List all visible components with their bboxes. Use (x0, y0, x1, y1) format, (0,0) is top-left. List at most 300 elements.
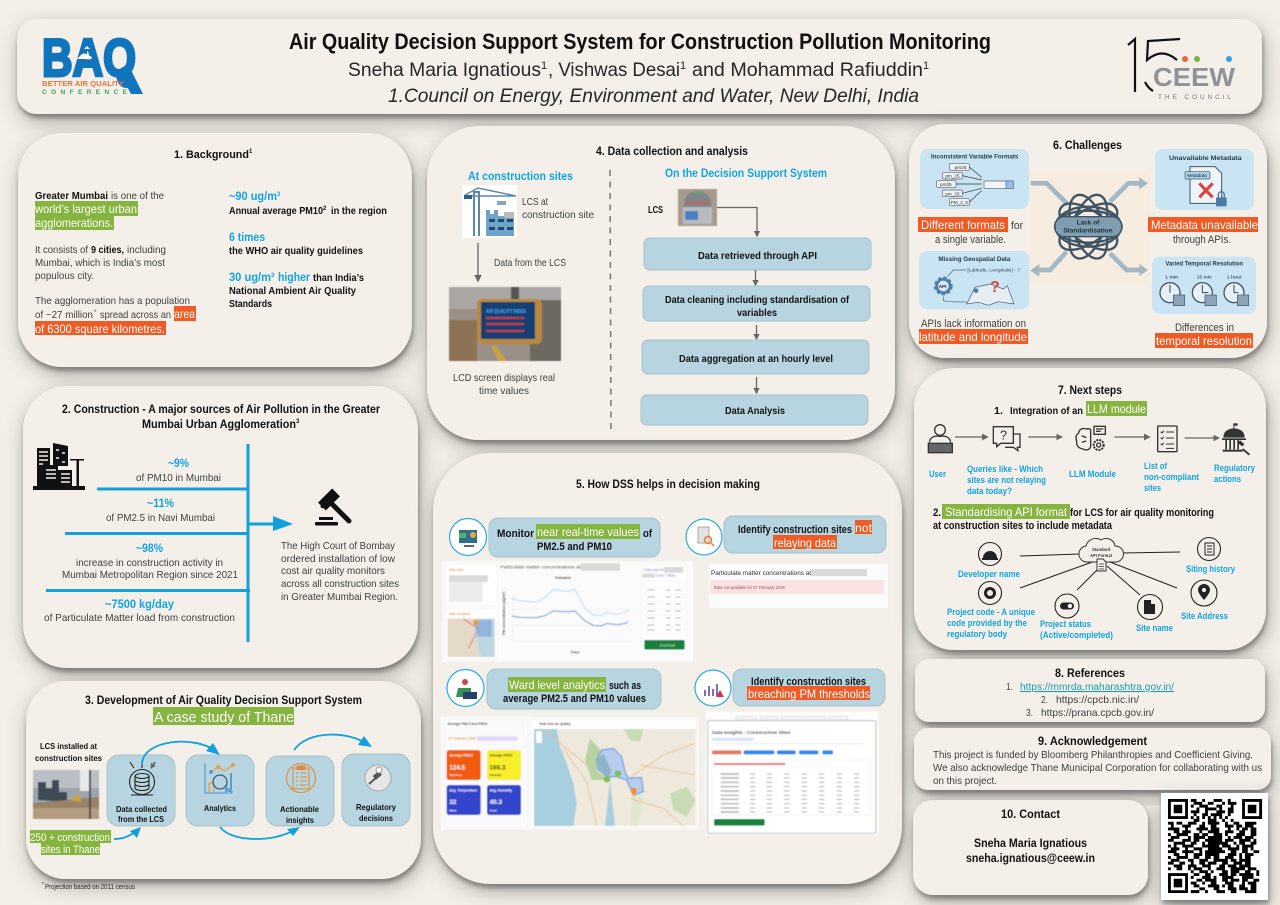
card: inconsistent formats: pm_25 (945, 191, 960, 196)
node: project status (1040, 594, 1113, 641)
card: not relaying: relaying data (774, 536, 836, 550)
caption: different formats: a single variable. (935, 234, 1006, 246)
heading: 7. Next steps (1058, 385, 1122, 397)
stat: 9%: ~9% (168, 458, 189, 470)
text block: population: * (94, 310, 97, 316)
subheading: standardising API (933, 504, 1214, 532)
text block: Greater Mumbai: is one of the (111, 190, 164, 202)
step: analysis (641, 395, 868, 425)
label: LCS installed: construction sites (35, 753, 102, 763)
flow box: analytics (186, 755, 254, 826)
labels: pipeline steps: Queries like - Which (967, 464, 1043, 475)
screenshot: monitoring dashboard (442, 561, 693, 662)
text block: 9 cities: 9 cities, (91, 244, 124, 256)
text block: funding (933, 749, 1262, 787)
icon: monitor (450, 518, 486, 556)
screenshot: ward dashboard: 07 February 2026 (448, 736, 476, 740)
stat: 30 ug/m3 higher: National Ambient Air Quality (229, 285, 356, 297)
screenshot: ward dashboard: Avg. Humidity (490, 789, 512, 793)
stat: 98%: ~98% (136, 543, 163, 555)
screenshot: monitoring dashboard: Download (660, 643, 675, 647)
node: site name: Site name (1136, 623, 1173, 634)
icon: gavel (315, 489, 349, 526)
screenshot: ward dashboard (441, 717, 698, 829)
caption: temporal: Differences in (1175, 322, 1234, 334)
icon: regulatory gavel (365, 765, 391, 791)
card: unavailable metadata: Metadata (1187, 173, 1207, 178)
panel: 7 Next steps (914, 368, 1266, 650)
node: developer name (958, 542, 1020, 580)
node: site address: Site Address (1181, 611, 1228, 622)
heading: 6. Challenges (1053, 140, 1122, 152)
text block: Greater Mumbai (34, 190, 164, 230)
text block: Greater Mumbai: world’s largest urban (34, 202, 137, 216)
text block: funding: on this project. (933, 775, 997, 787)
card: inconsistent formats: PM_2_5 (951, 200, 968, 205)
authors: and Mohammad Rafiuddin (692, 59, 923, 81)
flow box: analytics: Analytics (204, 803, 236, 813)
photo: LCD screen (449, 287, 561, 361)
step: cleaning: variables (737, 307, 777, 319)
list: references (1006, 681, 1174, 719)
contact details (966, 838, 1095, 865)
screenshot: ward dashboard: Average PM10 (490, 754, 512, 758)
stat: 90 ug/m3: 3 (277, 192, 281, 198)
subheading: standardising API: Standardising API format (945, 505, 1068, 519)
text block: population: of ~27 million (35, 309, 93, 321)
screenshot: ward dashboard: 166.3 (490, 764, 506, 771)
stat: 7500 kg/day: of Particulate Matter load from construction (44, 612, 235, 624)
flow box: data collected: Data collected (116, 804, 167, 814)
card: inconsistent formats (920, 149, 1029, 209)
card: inconsistent formats: Inconsistent Variable Formats (931, 153, 1019, 160)
heading: at construction sites: At construction sites (468, 169, 573, 183)
text block: population: The agglomeration has a population (35, 295, 190, 307)
node: project status: (Active/completed) (1040, 630, 1113, 641)
subheading: standardising API: at construction sites to include metadata (933, 520, 1113, 532)
authors: Sneha Maria Ignatious (348, 59, 541, 81)
labels: pipeline steps: Regulatory (1214, 463, 1256, 474)
card: missing geospatial: API (939, 284, 946, 289)
icon: user at keyboard (928, 425, 952, 453)
stat: 30 ug/m3 higher: Standards (229, 298, 272, 310)
stat: 98% (62, 543, 238, 581)
step: aggregation: Data aggregation at an hourly level (679, 353, 833, 365)
flow box: actionable insights (266, 756, 334, 826)
icon: brain and gear (1076, 426, 1105, 450)
panel: 1 Background (18, 133, 412, 367)
labels: pipeline steps: List of (1144, 461, 1168, 472)
node: project code: regulatory body (947, 629, 1008, 640)
card: unavailable metadata (1155, 149, 1254, 210)
panel: 2 Construction (23, 386, 418, 668)
step: cleaning (643, 286, 870, 321)
arrow (754, 270, 756, 285)
screenshot: monitoring dashboard: Daily data for (644, 568, 665, 572)
card: inconsistent formats: pm25 (955, 165, 967, 170)
arrow: data from LCS: Data from the LCS (494, 257, 566, 269)
text block: 9 cities: including (127, 244, 166, 256)
arrow: LCS to API (717, 208, 757, 236)
card: monitor: of (643, 528, 652, 540)
logo: BAQ: BAQ (42, 29, 136, 88)
icon: analytics chart (205, 763, 235, 793)
authors: , Vishwas Desai (548, 59, 680, 81)
diagram: fishbone lines and arrow (46, 444, 293, 642)
stat: 7500 kg/day (44, 599, 235, 624)
step: API: Data retrieved through API (698, 250, 817, 262)
screenshot: no data message: Particulate matter concentrations at (711, 570, 811, 577)
screenshot: data insights table (706, 712, 878, 835)
icon: clipboard (286, 764, 316, 792)
screenshot: monitoring dashboard: Site Info (449, 568, 464, 572)
subheading: LLM integration (994, 401, 1147, 417)
panel: 5 How DSS helps (433, 453, 902, 884)
text block: High Court order: across all construction sites (281, 578, 399, 590)
icon: database (130, 761, 155, 795)
text block: 9 cities: populous city. (35, 270, 94, 282)
heading: Mumbai Urban Agglomeration (142, 419, 296, 431)
footnote (42, 882, 135, 891)
card: ward analytics: Ward level analytics (509, 678, 605, 692)
labels: pipeline steps: sites (1144, 483, 1161, 494)
card: not relaying (724, 516, 886, 553)
arrow (955, 435, 987, 439)
screenshot: ward dashboard: 40.3 (490, 799, 502, 806)
authors: 1 (680, 60, 686, 72)
labels: pipeline steps: sites are not relaying (967, 475, 1046, 486)
card: ward analytics (487, 669, 661, 709)
icon: cloud standard API format (1079, 538, 1124, 571)
icon: ward map pin (447, 670, 484, 706)
arrow: data from LCS (478, 243, 566, 281)
stat: 90 ug/m3: 2 (323, 206, 327, 212)
arrow (756, 377, 758, 393)
stat: 6 times: the WHO air quality guidelines (229, 245, 363, 257)
flow box: actionable insights: Actionable (280, 804, 319, 814)
list: references: 1. (1006, 681, 1013, 693)
diagram: lack of standardisation (1030, 172, 1150, 283)
labels: pipeline steps: data today? (967, 486, 1012, 497)
logo: CEEW (1128, 39, 1235, 101)
panel: 6 Challenges (909, 124, 1267, 358)
screenshot: no data message: Data not available for 07 February 2026. (714, 585, 786, 590)
screenshot: monitoring dashboard: Time (570, 650, 580, 655)
labels: pipeline steps: actions (1214, 474, 1241, 485)
heading: 1 (249, 149, 253, 155)
node: site address (1181, 580, 1228, 622)
screenshot: monitoring dashboard: Pollutants (555, 576, 571, 580)
caption: temporal: temporal resolution (1156, 334, 1252, 348)
contact details: Sneha Maria Ignatious (974, 838, 1087, 850)
diagram: API spokes (1020, 552, 1180, 595)
screenshot: ward dashboard: Moderate (490, 773, 502, 777)
screenshot: monitoring dashboard: (Last 7 days) (656, 574, 675, 578)
caption: metadata unavailable: Metadata unavailable (1151, 218, 1258, 232)
image: crane and building (462, 185, 517, 238)
arrow (1114, 435, 1149, 439)
screenshot: ward dashboard: Warm (449, 808, 457, 812)
step: aggregation (642, 340, 869, 374)
card: unavailable metadata: Unavailable Metadata (1169, 155, 1242, 162)
subheading: standardising API: 2. (933, 507, 941, 519)
heading: 10. Contact (1001, 809, 1060, 821)
screenshot: ward dashboard: 124.5 (449, 764, 466, 771)
card: temporal resolution: 1 min (1165, 275, 1179, 280)
heading (62, 404, 380, 431)
node: project status: Project status (1040, 619, 1091, 630)
text block: population: area (174, 307, 195, 321)
icon: court and gavel (1222, 423, 1250, 455)
photo: LCS device (678, 189, 717, 226)
flow box: actionable insights: insights (286, 815, 314, 825)
stat: 7500 kg/day: ~7500 kg/day (105, 599, 175, 611)
stat: 30 ug/m3 higher (229, 270, 364, 310)
card: temporal resolution: 1 hour (1227, 275, 1242, 280)
divider: dashed (610, 170, 611, 433)
heading: 8. References (1055, 668, 1125, 680)
labels: pipeline steps (929, 461, 1256, 497)
arrow (1185, 436, 1219, 440)
labels: pipeline steps: LLM Module (1069, 469, 1116, 480)
heading: 4. Data collection and analysis (596, 146, 748, 158)
stat: 9%: of PM10 in Mumbai (136, 472, 221, 484)
subheading: LLM integration: LLM module (1087, 402, 1146, 416)
text block: Greater Mumbai: Greater Mumbai (35, 190, 108, 202)
label: LCS installed: LCS installed at (40, 741, 97, 751)
card: monitor: Monitor (497, 528, 535, 540)
flow box: data collected: from the LCS (118, 814, 164, 824)
text block: population: spread across an (100, 309, 171, 321)
highlight: 250 sites (30, 830, 111, 856)
list: references: 2. (1041, 694, 1048, 706)
panel: 9 Acknowledgement (914, 728, 1271, 790)
screenshot: ward dashboard: Real time air quality (539, 722, 571, 726)
stat: 11%: ~11% (147, 498, 174, 510)
node: project code (947, 582, 1035, 640)
text block: 9 cities: Mumbai, which is India’s most (35, 257, 165, 269)
text block: funding: This project is funded by Bloomberg Philanthropies and Coefficient Giving. (933, 749, 1253, 761)
stat: 90 ug/m3: ~90 ug/m (229, 189, 277, 203)
text block: High Court order (281, 540, 399, 603)
card: temporal resolution (1152, 257, 1256, 314)
card: inconsistent formats: pm_25 (945, 174, 960, 179)
screenshot: monitoring dashboard: Site location (449, 612, 471, 616)
heading: 2. Construction - A major sources of Air Pollution in the Greater (62, 404, 380, 416)
diagram: lack of standardisation: Standardisation (1063, 228, 1113, 235)
screenshot: ward dashboard: Avg. Temperature (449, 789, 477, 793)
stat: 30 ug/m3 higher: 3 (271, 273, 275, 279)
screenshot: data insights table: Data Insights - Construction Sites (712, 730, 791, 735)
title: Air Quality Decision Support System for Construction Pollution Monitoring (289, 29, 991, 54)
footnote: Projection based on 2011 census (45, 884, 135, 891)
text block: 9 cities: It consists of (35, 244, 88, 256)
card: temporal resolution: 15 min (1197, 275, 1212, 280)
node: siting history: Siting history (1186, 564, 1236, 575)
list: references: https://cpcb.nic.in/ (1056, 694, 1139, 706)
card: not relaying: not (855, 521, 873, 535)
node: developer name: Developer name (958, 569, 1020, 580)
arrow (1028, 435, 1062, 439)
diagram: lack of standardisation: Lack of (1077, 220, 1100, 227)
icon: question bubbles: ? (1000, 429, 1007, 443)
step: API (644, 238, 871, 270)
photo: construction site with monitor (33, 770, 99, 819)
logo: BAQ: BETTER AIR QUALITY (42, 81, 124, 88)
icon: search document (686, 519, 722, 555)
icon: question bubbles (993, 427, 1020, 451)
logo: CEEW: THE COUNCIL (1158, 94, 1231, 101)
text block: High Court order: The High Court of Bombay (281, 540, 396, 552)
heading: on the DSS: On the Decision Support System (665, 166, 827, 180)
screenshot: ward dashboard: Average PM2.5 and PM10 (447, 722, 487, 726)
text block: High Court order: in Greater Mumbai Region. (281, 591, 398, 603)
card: temporal resolution: Varied Temporal Resolution (1165, 260, 1243, 267)
labels: pipeline steps: User (929, 469, 946, 480)
heading: 3. Development of Air Quality Decision Support System (85, 695, 362, 707)
arrow (756, 325, 758, 339)
screenshot: ward dashboard: 32 (449, 799, 457, 806)
screenshot: monitoring dashboard: Particulate matter concentrations at (500, 564, 581, 569)
label: LCS at site: LCS at (522, 196, 548, 208)
stat: 98%: Mumbai Metropolitan Region since 2021 (62, 569, 238, 581)
text block: 9 cities (35, 244, 166, 282)
list: references: https://prana.cpcb.gov.in/ (1041, 707, 1154, 719)
text block: High Court order: cost air quality monitors (281, 565, 385, 577)
text block: Greater Mumbai: agglomerations. (35, 216, 113, 230)
card: breaching thresholds (733, 669, 885, 706)
caption: LCD: time values (479, 385, 529, 397)
subheading: LLM integration: Integration of an (1010, 405, 1083, 417)
list: references: https://mmrda.maharashtra.gov.in/ (1020, 681, 1174, 693)
card: ward analytics: average PM2.5 and PM10 values (503, 693, 646, 705)
heading: 5. How DSS helps in decision making (576, 479, 760, 491)
caption: lat long: latitude and longitude (919, 330, 1027, 344)
heading: 1. Background (174, 149, 249, 161)
caption: metadata unavailable (1148, 217, 1258, 246)
authors (348, 59, 929, 81)
screenshot: ward dashboard: Good (490, 808, 497, 812)
flow box: regulatory decisions: decisions (359, 813, 393, 823)
label: LCS installed (35, 741, 102, 763)
flow box: regulatory decisions (342, 754, 410, 826)
subheading: LLM integration: 1. (994, 405, 1003, 417)
stat: 98%: increase in construction activity in (76, 557, 223, 569)
stat: 6 times (229, 230, 363, 257)
highlight: 250 sites: 250 + construction (30, 832, 110, 844)
arrows: flow (114, 735, 372, 839)
stat: 11%: of PM2.5 in Navi Mumbai (106, 512, 215, 524)
authors: 1 (541, 60, 547, 72)
icon: buildings with crane (33, 443, 85, 490)
caption: lat long: APIs lack information on (921, 318, 1026, 330)
panel: 3 Development of DSS (26, 681, 421, 879)
icon: threshold alert (695, 670, 731, 706)
text block: population: of 6300 square kilometres. (35, 322, 165, 336)
caption: different formats: for (1011, 220, 1023, 232)
QR code (1161, 793, 1268, 900)
caption: temporal (1155, 322, 1253, 348)
stat: 11% (106, 498, 215, 524)
card: missing geospatial: ? (990, 279, 1000, 296)
label: LCS: LCS (648, 204, 663, 216)
text block: population (35, 295, 196, 336)
stat: 6 times: 6 times (229, 230, 265, 244)
diagram content (919, 149, 1256, 314)
list: references: 3. (1026, 707, 1033, 719)
caption: different formats (918, 217, 1023, 246)
screenshot: no data message (709, 564, 888, 608)
card: not relaying: Identify construction sites (738, 524, 852, 536)
stat: 30 ug/m3 higher: higher (278, 270, 310, 284)
icon: cloud standard API format: Standard (1092, 547, 1110, 552)
panel: header (17, 19, 1262, 114)
text block: High Court order: ordered installation of low (281, 553, 395, 565)
authors: 1 (923, 60, 929, 72)
icon: cloud standard API format: API Format (1090, 553, 1112, 558)
screenshot: ward dashboard: Very Poor (449, 773, 462, 777)
card: inconsistent formats: pm25 (940, 182, 952, 187)
caption: lat long (919, 318, 1028, 344)
screenshot: ward dashboard: Average PM2.5 (449, 754, 473, 758)
caption: different formats: Different formats (921, 218, 1005, 232)
panel: 10 Contact (913, 800, 1148, 895)
logo: BAQ: CONFERENCE (42, 89, 128, 96)
labels: pipeline steps: non-compliant (1144, 472, 1200, 483)
caption: LCD: LCD screen displays real (453, 372, 555, 384)
flow box: data collected (107, 755, 175, 826)
stat: 30 ug/m3 higher: 30 ug/m (229, 270, 271, 284)
icon: checklist (1158, 426, 1177, 452)
card: missing geospatial (919, 251, 1029, 309)
card: breaching thresholds: Identify construction sites (751, 676, 866, 688)
node: project code: Project code - A unique (947, 607, 1035, 618)
caption: metadata unavailable: through APIs. (1173, 234, 1231, 246)
step: analysis: Data Analysis (725, 405, 785, 417)
stat: 90 ug/m3 (229, 189, 387, 217)
card: missing geospatial: Missing Geospatial Data (938, 256, 1011, 263)
card: monitor: near real-time values (537, 525, 639, 539)
heading: 9. Acknowledgement (1038, 736, 1147, 748)
highlight: case study: A case study of Thane (154, 709, 294, 726)
panel: 8 References (915, 659, 1265, 722)
contact details: sneha.ignatious@ceew.in (966, 853, 1095, 865)
subheading: standardising API: for LCS for air quality monitoring (1070, 507, 1214, 519)
card: monitor: PM2.5 and PM10 (537, 541, 612, 553)
footnote: * (42, 882, 44, 888)
photo: LCD screen: AIR QUALITY INDEX (486, 309, 527, 315)
highlight: 250 sites: sites in Thane (41, 844, 100, 856)
stat: 30 ug/m3 higher: than India’s (313, 272, 364, 284)
stat: 90 ug/m3: Annual average PM10 (229, 205, 323, 217)
label: LCS at site: construction site (522, 209, 594, 221)
card: breaching thresholds: breaching PM thresholds (748, 687, 870, 701)
panel: 4 Data collection (427, 126, 895, 440)
caption: LCD (453, 372, 555, 397)
label: LCS at site (522, 196, 594, 221)
step: cleaning: Data cleaning including standardisation of (665, 294, 849, 306)
logo: CEEW: CEEW (1153, 62, 1235, 92)
heading: 3 (296, 419, 300, 425)
node: siting history (1186, 538, 1236, 575)
node: site name (1136, 594, 1173, 634)
text block: funding: We also acknowledge Thane Municipal Corporation for collaborating with us (933, 762, 1262, 774)
stat: 90 ug/m3: in the region (331, 205, 387, 217)
stat: 9% (136, 458, 221, 484)
screenshot: monitoring dashboard: PM concentration (ug/m³) (502, 591, 506, 635)
card: monitor (489, 518, 660, 557)
node: project code: code provided by the (947, 618, 1027, 629)
